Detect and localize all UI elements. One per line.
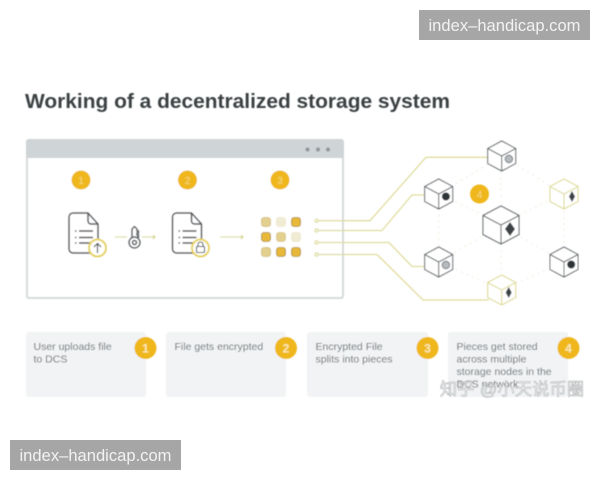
step badge 1	[72, 170, 90, 190]
watermark: bottom left: index–handicap.com	[20, 446, 172, 465]
node: lower right cube	[550, 247, 578, 277]
infographic body	[25, 91, 584, 399]
step badge 3: 3	[277, 176, 283, 187]
file pieces grid	[262, 218, 300, 256]
node: center cube	[483, 206, 519, 244]
card 4 text: Pieces get stored	[456, 341, 538, 353]
watermark: bottom left	[10, 440, 181, 470]
card 4 text: storage nodes in the	[456, 366, 552, 378]
watermark: zhihu: 知乎 @小天说币圈	[440, 380, 584, 399]
icon: document upload	[69, 213, 106, 256]
window dots	[306, 148, 330, 152]
card 4 text: across multiple	[456, 354, 527, 366]
card 3 text: Encrypted File	[316, 341, 383, 353]
title: Working of a decentralized storage system	[25, 91, 450, 113]
node: upper left cube	[425, 179, 453, 209]
card 1 text: User uploads file	[34, 341, 112, 353]
panel: card 4	[448, 332, 580, 397]
node: bottom cube	[488, 275, 516, 305]
panel: browser window	[26, 139, 344, 298]
step badge 4: 4	[477, 190, 483, 201]
window title bar	[26, 139, 344, 158]
arrow	[220, 234, 244, 240]
step badge 2: 2	[185, 176, 191, 187]
card 3 badge: 3	[424, 342, 431, 356]
card 2 text: File gets encrypted	[174, 341, 263, 353]
card 1 badge: 1	[142, 342, 149, 356]
step badge 2	[178, 170, 197, 190]
network dotted links	[439, 156, 564, 290]
panel: card 3	[307, 332, 438, 397]
node: lower left cube	[425, 247, 453, 277]
panel: card 2	[166, 332, 297, 397]
arrow with key	[115, 225, 156, 250]
step badge 1: 1	[78, 176, 84, 187]
card 1 text: to DCS	[34, 354, 67, 366]
card 4 text: DCS network	[456, 378, 519, 390]
card 4 badge: 4	[565, 342, 572, 356]
card 2 badge: 2	[283, 342, 290, 356]
step badge 3	[270, 170, 290, 190]
icon: document encrypted	[172, 213, 209, 256]
card 3 text: splits into pieces	[316, 354, 393, 366]
watermark: top right	[419, 10, 590, 40]
connector lines to nodes	[315, 157, 489, 300]
node: upper right cube	[550, 179, 578, 209]
watermark: top right: index–handicap.com	[428, 16, 580, 35]
node: top cube	[488, 141, 516, 171]
panel: card 1	[26, 332, 156, 397]
step badge 4	[470, 184, 489, 204]
